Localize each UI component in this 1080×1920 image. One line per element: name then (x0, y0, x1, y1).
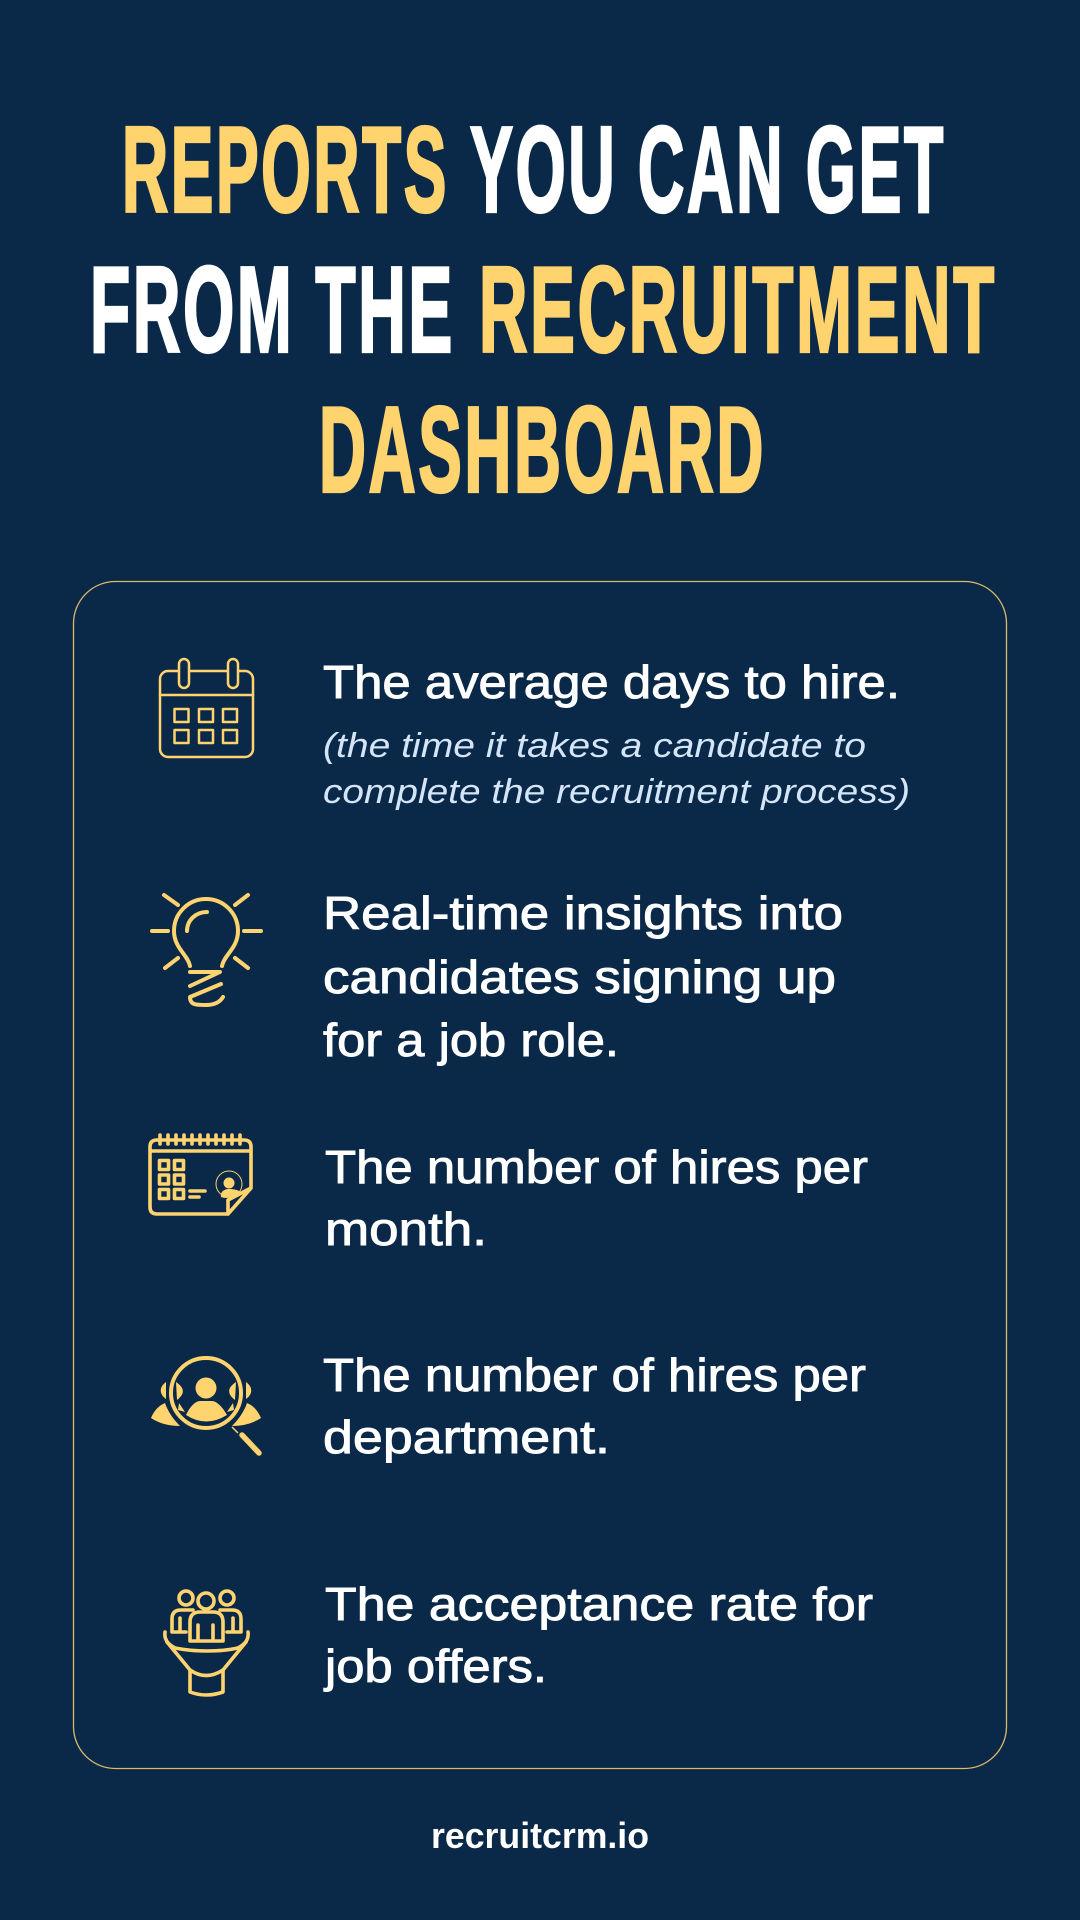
icon: candidate funnel (165, 1591, 248, 1695)
report text: average days to hire: complete the recruitment process) (323, 773, 910, 811)
report text: average days to hire (323, 656, 910, 811)
report text: real-time insights: for a job role. (323, 1014, 619, 1066)
icon: calendar (160, 659, 253, 757)
report text: hires per department (323, 1349, 866, 1463)
report text: real-time insights: Real-time insights into (323, 887, 843, 939)
report text: average days to hire: The average days to hire. (323, 656, 900, 708)
report text: acceptance rate: job offers. (323, 1640, 547, 1692)
report text: hires per month (325, 1141, 868, 1255)
report text: hires per department: department. (323, 1411, 610, 1463)
report text: real-time insights: candidates signing up (323, 951, 836, 1003)
report text: hires per month: month. (325, 1203, 487, 1255)
icon: hires calendar (150, 1135, 251, 1214)
footer: website: recruitcrm.io (431, 1815, 649, 1856)
report text: real-time insights (323, 887, 843, 1066)
report text: hires per month: The number of hires per (325, 1141, 868, 1193)
icon: light bulb (152, 895, 261, 1005)
report text: hires per department: The number of hires per (323, 1349, 866, 1401)
title (90, 102, 997, 518)
panel: reports list (74, 582, 1006, 1768)
icon: magnifier over people (151, 1358, 261, 1453)
title: FROM THE (90, 242, 455, 378)
title: REPORTS (122, 102, 449, 238)
report text: acceptance rate (323, 1578, 873, 1692)
report text: average days to hire: (the time it takes a candidate to (323, 727, 866, 765)
report text: acceptance rate: The acceptance rate for (325, 1578, 873, 1630)
